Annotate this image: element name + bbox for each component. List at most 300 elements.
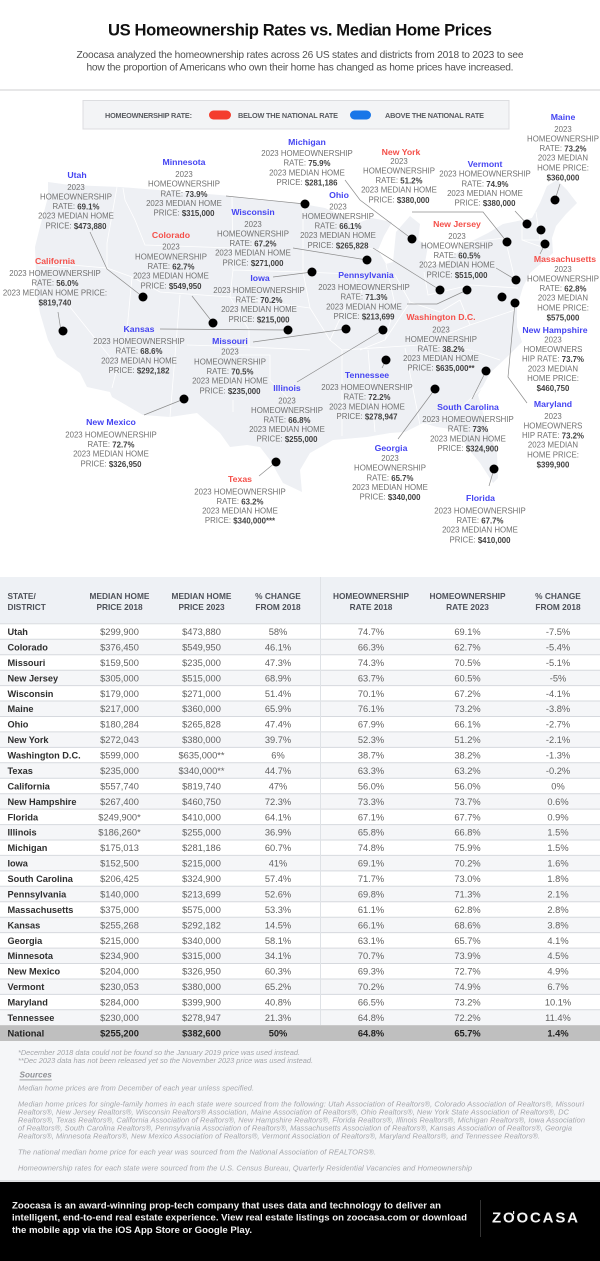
row: Wisconsin: $271,000: [182, 689, 221, 699]
label: Pennsylvania: 2023 HOMEOWNERSHIP: [318, 283, 410, 292]
table header: RATE 2018: [350, 602, 393, 612]
label: Colorado: RATE: 62.7%: [148, 262, 194, 271]
label: Georgia: RATE: 65.7%: [367, 474, 413, 482]
row: Tennessee: Tennessee: [8, 1013, 54, 1023]
row: Kansas: 68.6%: [454, 920, 481, 930]
label: Maryland: [522, 399, 584, 469]
row: Minnesota: 4.5%: [547, 951, 569, 961]
label: Washington D.C.: RATE: 38.2%: [418, 344, 464, 354]
row: National: 1.4%: [547, 1028, 569, 1038]
row: New Mexico: 69.3%: [358, 967, 384, 977]
label: California: 2023 MEDIAN HOME PRICE:: [3, 288, 107, 298]
row: Vermont: $230,053: [100, 982, 139, 992]
row: New Mexico: New Mexico: [8, 967, 60, 977]
row: Minnesota: 70.7%: [358, 951, 384, 961]
row: National: [0, 1025, 600, 1041]
row: Kansas: 66.1%: [358, 920, 384, 930]
label: Colorado: 2023 MEDIAN HOME: [133, 272, 209, 280]
label: New Hampshire: New Hampshire: [522, 325, 588, 335]
row: Texas: Texas: [8, 766, 33, 776]
row: Illinois: 1.5%: [547, 828, 569, 838]
row: Pennsylvania: 71.3%: [454, 890, 481, 900]
label: Maine: 2023: [554, 125, 572, 134]
label: Maryland: HOME PRICE:: [527, 450, 579, 460]
label: New Hampshire: [522, 325, 588, 392]
row: New Jersey: New Jersey: [8, 673, 59, 683]
table header: PRICE 2018: [96, 602, 143, 612]
label: Wisconsin: PRICE: $271,000: [222, 258, 284, 268]
label: Iowa: [213, 273, 305, 324]
label: Vermont: PRICE: $380,000: [454, 198, 516, 208]
row: Utah: -7.5%: [546, 627, 570, 637]
title: US Homeownership Rates vs. Median Home Prices: [108, 20, 492, 40]
intro text: [76, 50, 524, 74]
intro text: Zoocasa analyzed the homeownership rates across 26 US states and districts from 2018 to 2023 to see: [76, 50, 524, 61]
row: Maryland: Maryland: [8, 998, 48, 1008]
label: Texas: [194, 474, 286, 525]
label: New Jersey: [419, 219, 495, 280]
label: New Jersey: PRICE: $515,000: [426, 270, 488, 280]
row: Michigan: $281,186: [182, 843, 221, 853]
label: Iowa: Iowa: [250, 273, 270, 283]
row: Massachusetts: 61.1%: [358, 905, 384, 915]
row: California: 47%: [269, 781, 287, 791]
legend: BELOW THE NATIONAL RATE: [238, 111, 338, 120]
row: Missouri: 74.3%: [358, 658, 384, 668]
label: Missouri: HOMEOWNERSHIP: [194, 358, 266, 366]
legend: ABOVE THE NATIONAL RATE: [385, 111, 484, 120]
row: Florida: 0.9%: [547, 812, 569, 822]
row: California: California: [8, 781, 51, 791]
row: Iowa: $215,000: [182, 859, 221, 869]
label: Massachusetts: [527, 254, 599, 322]
row: New Mexico: $204,000: [100, 967, 139, 977]
notes and sources: Realtors®, Minnesota Realtors®, New Mexico Association of Realtors®, Vermont Association of Realtors®, Maryland Realtors®, and Tennessee Realtors®.: [18, 1132, 540, 1140]
label: Florida: PRICE: $410,000: [449, 536, 511, 544]
label: Missouri: PRICE: $235,000: [199, 386, 261, 396]
label: Vermont: 2023 MEDIAN HOME: [447, 189, 523, 198]
row: New York: -2.1%: [546, 735, 570, 745]
footer text: intelligent, end-to-end real estate experience. View real estate listings on zoocasa.com or download: [12, 1212, 467, 1224]
label: Pennsylvania: PRICE: $213,699: [333, 312, 395, 321]
row: New Jersey: $515,000: [182, 673, 221, 683]
label: Texas: PRICE: $340,000***: [205, 516, 276, 525]
row: New York: 51.2%: [454, 735, 481, 745]
row: New York: 52.3%: [358, 735, 384, 745]
row: Ohio: $180,284: [100, 720, 139, 730]
table header: DISTRICT: [8, 602, 46, 612]
row: Texas: 63.2%: [454, 766, 481, 776]
label: Massachusetts: 2023: [554, 265, 572, 274]
label: Massachusetts: 2023 MEDIAN: [538, 294, 588, 302]
row: Massachusetts: Massachusetts: [8, 905, 73, 915]
row: Florida: Florida: [8, 812, 39, 822]
row: Maryland: 40.8%: [265, 998, 291, 1008]
label: Georgia: 2023 MEDIAN HOME: [352, 483, 428, 492]
notes and sources: **Dec 2023 data has not been released yet so the November 2023 price was used instead.: [18, 1056, 313, 1065]
row: California: $819,740: [182, 781, 221, 791]
footer: [0, 1182, 600, 1261]
table header: RATE 2023: [446, 602, 489, 612]
row: National: $255,200: [100, 1028, 139, 1038]
label: Utah: 2023: [67, 183, 85, 192]
label: Washington D.C.: 2023 MEDIAN HOME: [403, 354, 479, 363]
logo: Zoocasa: ZOOCASA: [492, 1210, 578, 1226]
row: New York: 39.7%: [265, 735, 291, 745]
label: Michigan: Michigan: [288, 137, 326, 147]
row: Minnesota: 73.9%: [454, 951, 481, 961]
label: Illinois: 2023: [278, 396, 296, 406]
label: Ohio: Ohio: [329, 190, 349, 200]
row: Illinois: $255,000: [182, 828, 221, 838]
row: Vermont: 70.2%: [358, 982, 384, 992]
row: Ohio: 66.1%: [454, 720, 481, 730]
label: Maine: HOMEOWNERSHIP: [527, 134, 599, 144]
label: Iowa: PRICE: $215,000: [228, 315, 290, 324]
label: Minnesota: PRICE: $315,000: [153, 208, 215, 218]
label: Michigan: RATE: 75.9%: [284, 158, 330, 168]
label: South Carolina: South Carolina: [437, 402, 499, 412]
label: Maryland: HIP RATE: 73.2%: [522, 431, 584, 440]
label: Utah: HOMEOWNERSHIP: [40, 192, 112, 202]
row: Ohio: 47.4%: [265, 720, 291, 730]
notes and sources: The national median home price for each year was sourced from the National Association of REALTORS®.: [18, 1148, 376, 1156]
row: New Hampshire: $267,400: [100, 797, 139, 807]
row: Florida: $249,900*: [98, 812, 141, 822]
row: New Mexico: 60.3%: [265, 967, 291, 977]
label: Florida: Florida: [466, 493, 495, 503]
label: Washington D.C.: PRICE: $635,000**: [407, 364, 476, 372]
row: New Jersey: 63.7%: [358, 673, 384, 683]
row: Colorado: 46.1%: [265, 642, 291, 652]
row: Tennessee: 72.2%: [454, 1013, 481, 1023]
label: Utah: [38, 170, 114, 230]
row: Florida: $410,000: [182, 812, 221, 822]
row: Maine: $217,000: [100, 704, 139, 714]
row: Colorado: Colorado: [8, 642, 48, 652]
label: Pennsylvania: RATE: 71.3%: [341, 292, 387, 302]
row: South Carolina: 71.7%: [358, 874, 384, 884]
row: Michigan: Michigan: [8, 843, 48, 853]
table header: FROM 2018: [535, 602, 581, 612]
row: New Jersey: 60.5%: [454, 673, 481, 683]
row: Maine: 76.1%: [358, 704, 384, 714]
row: Utah: 69.1%: [454, 627, 481, 637]
label: New Hampshire: HOMEOWNERS: [524, 345, 582, 354]
leader lines: [58, 180, 560, 486]
row: New Hampshire: 0.6%: [547, 797, 569, 807]
row: Iowa: Iowa: [8, 859, 29, 869]
row: Tennessee: 64.8%: [358, 1013, 384, 1023]
row: Missouri: $235,000: [182, 658, 221, 668]
label: Ohio: PRICE: $265,828: [307, 241, 369, 250]
row: California: $557,740: [100, 781, 139, 791]
table header: HOMEOWNERSHIP: [429, 591, 506, 601]
label: New York: New York: [382, 147, 421, 157]
label: Washington D.C.: Washington D.C.: [406, 312, 476, 322]
row: Kansas: Kansas: [8, 920, 40, 930]
row: Washington D.C.: $635,000**: [178, 750, 225, 760]
row: Maryland: $399,900: [182, 998, 221, 1008]
row: Minnesota: $315,000: [182, 951, 221, 961]
label: New Hampshire: HOME PRICE:: [527, 374, 579, 383]
label: Michigan: PRICE: $281,186: [276, 178, 338, 187]
label: South Carolina: PRICE: $324,900: [437, 444, 499, 453]
label: Kansas: [93, 324, 185, 375]
label: Minnesota: 2023 MEDIAN HOME: [146, 199, 222, 208]
label: Maryland: 2023: [544, 412, 562, 421]
row: Texas: 63.3%: [358, 766, 384, 776]
row: Vermont: 65.2%: [265, 982, 291, 992]
notes and sources: of Realtors®, South Carolina Realtors®, Pennsylvania Association of Realtors®, Massachusetts Association of Realtors®, Kansas Association of Realtors®, Georgia: [18, 1124, 572, 1132]
row: South Carolina: $206,425: [100, 874, 139, 884]
label: Wisconsin: [215, 207, 291, 268]
label: Georgia: Georgia: [375, 443, 408, 453]
row: Missouri: -5.1%: [546, 658, 570, 668]
label: New York: HOMEOWNERSHIP: [363, 166, 435, 176]
label: Wisconsin: 2023: [244, 220, 262, 229]
row: Maine: $360,000: [182, 704, 221, 714]
row: Kansas: 14.5%: [265, 920, 291, 930]
label: Missouri: RATE: 70.5%: [207, 367, 253, 376]
row: Wisconsin: 51.4%: [265, 689, 291, 699]
row: New Jersey: $305,000: [100, 673, 139, 683]
row: Vermont: $380,000: [182, 982, 221, 992]
table: prices and homeownership rates by state: [0, 577, 600, 1041]
footer text: Zoocasa is an award-winning prop-tech company that uses data and technology to deliver an: [12, 1200, 441, 1212]
row: Colorado: $549,950: [182, 642, 221, 652]
row: Minnesota: 34.1%: [265, 951, 291, 961]
row: South Carolina: 1.8%: [547, 874, 569, 884]
row: Pennsylvania: 2.1%: [547, 890, 569, 900]
label: Minnesota: [146, 157, 222, 218]
row: Vermont: Vermont: [8, 982, 44, 992]
label: Michigan: 2023 HOMEOWNERSHIP: [261, 149, 353, 158]
row: National: 64.8%: [358, 1028, 385, 1038]
row: Wisconsin: $179,000: [100, 689, 139, 699]
label: Florida: [434, 493, 526, 544]
row: Washington D.C.: 6%: [271, 750, 285, 760]
row: Illinois: 66.8%: [454, 828, 481, 838]
label: Illinois: PRICE: $255,000: [256, 434, 318, 444]
row: Washington D.C.: -1.3%: [546, 750, 570, 760]
label: Massachusetts: RATE: 62.8%: [540, 284, 586, 293]
label: New Mexico: 2023 MEDIAN HOME: [73, 450, 149, 458]
label: Missouri: 2023 MEDIAN HOME: [192, 376, 268, 386]
label: Maryland: 2023 MEDIAN: [528, 440, 578, 450]
notes and sources: Median home prices for single-family homes in each state were sourced from the following: Utah Association of Realtors®, Colorado Association of Realtors®, Missouri: [18, 1100, 584, 1108]
row: Wisconsin: -4.1%: [546, 689, 570, 699]
row: Ohio: $265,828: [182, 720, 221, 730]
label: New Jersey: New Jersey: [433, 219, 481, 229]
row: Florida: 64.1%: [265, 812, 291, 822]
label: Tennessee: PRICE: $278,947: [336, 412, 398, 421]
row: Washington D.C.: Washington D.C.: [8, 750, 81, 760]
label: Minnesota: Minnesota: [163, 157, 206, 167]
row: Georgia: 4.1%: [547, 936, 569, 946]
row: Iowa: 1.6%: [547, 859, 569, 869]
label: Illinois: HOMEOWNERSHIP: [251, 406, 323, 415]
row: Georgia: $340,000: [182, 936, 221, 946]
label: Michigan: [261, 137, 353, 187]
label: Massachusetts: HOMEOWNERSHIP: [527, 274, 599, 284]
row: Florida: 67.7%: [454, 812, 481, 822]
label: Missouri: Missouri: [212, 336, 248, 346]
label: Illinois: Illinois: [273, 383, 301, 393]
label: New Hampshire: HIP RATE: 73.7%: [522, 354, 584, 364]
label: Utah: RATE: 69.1%: [53, 202, 99, 211]
row: Utah: $473,880: [182, 627, 221, 637]
label: New Mexico: [65, 417, 157, 468]
legend: [83, 100, 509, 129]
label: New Hampshire: 2023 MEDIAN: [528, 364, 578, 374]
label: California: RATE: 56.0%: [32, 278, 78, 288]
label: South Carolina: [422, 402, 514, 453]
row: Maryland: 66.5%: [358, 998, 384, 1008]
row: Illinois: $186,260*: [98, 828, 141, 838]
notes and sources: Sources: [20, 1070, 52, 1080]
row: Iowa: $152,500: [100, 859, 139, 869]
row: National: $382,600: [182, 1028, 221, 1038]
row: Maine: Maine: [8, 704, 34, 714]
row: Texas: $235,000: [100, 766, 139, 776]
label: Colorado: HOMEOWNERSHIP: [135, 252, 207, 262]
row: Utah: 58%: [269, 627, 287, 637]
label: Colorado: PRICE: $549,950: [140, 282, 202, 290]
label: New Hampshire: $460,750: [537, 384, 570, 392]
row: Florida: 67.1%: [358, 812, 384, 822]
row: South Carolina: 57.4%: [265, 874, 291, 884]
row: Massachusetts: $575,000: [182, 905, 221, 915]
label: Texas: 2023 MEDIAN HOME: [202, 506, 278, 516]
row: Utah: 74.7%: [358, 627, 384, 637]
label: Maine: RATE: 73.2%: [540, 144, 586, 153]
label: Georgia: PRICE: $340,000: [359, 492, 421, 502]
row: National: National: [8, 1028, 44, 1038]
label: Ohio: 2023: [329, 202, 347, 212]
row: New Hampshire: 73.7%: [454, 797, 481, 807]
row: Vermont: 74.9%: [454, 982, 481, 992]
label: New Jersey: HOMEOWNERSHIP: [421, 242, 493, 250]
row: Colorado: 62.7%: [454, 642, 481, 652]
label: Colorado: Colorado: [152, 230, 190, 240]
row: Ohio: 67.9%: [358, 720, 384, 730]
row: Wisconsin: 70.1%: [358, 689, 384, 699]
label: Texas: 2023 HOMEOWNERSHIP: [194, 488, 286, 496]
row: Pennsylvania: Pennsylvania: [8, 890, 67, 900]
row: New Hampshire: 72.3%: [265, 797, 291, 807]
row: Tennessee: 21.3%: [265, 1013, 291, 1023]
table header: FROM 2018: [255, 602, 301, 612]
table header: STATE/: [8, 591, 36, 601]
row: New Hampshire: $460,750: [182, 797, 221, 807]
row: Colorado: 66.3%: [358, 642, 384, 652]
label: South Carolina: 2023 HOMEOWNERSHIP: [422, 415, 514, 424]
label: Kansas: PRICE: $292,182: [108, 366, 170, 375]
label: New Hampshire: 2023: [544, 336, 562, 344]
row: Maine: -3.8%: [546, 704, 570, 714]
row: Georgia: 58.1%: [265, 936, 291, 946]
row: New Mexico: 72.7%: [454, 967, 481, 977]
row: Pennsylvania: 69.8%: [358, 890, 384, 900]
label: New York: PRICE: $380,000: [368, 196, 430, 204]
row: Maryland: $284,000: [100, 998, 139, 1008]
footer text: the mobile app via the iOS App Store or Google Play.: [12, 1225, 252, 1236]
label: Vermont: RATE: 74.9%: [462, 180, 508, 188]
row: New York: $380,000: [182, 735, 221, 745]
label: Texas: RATE: 63.2%: [217, 497, 263, 506]
label: Maine: 2023 MEDIAN: [538, 154, 588, 162]
label: Georgia: HOMEOWNERSHIP: [354, 464, 426, 472]
label: Iowa: RATE: 70.2%: [236, 296, 282, 304]
label: New Jersey: RATE: 60.5%: [434, 251, 480, 260]
row: New Hampshire: New Hampshire: [8, 797, 76, 807]
row: Massachusetts: 62.8%: [454, 905, 481, 915]
row: California: 56.0%: [358, 781, 384, 791]
label: Missouri: [192, 336, 268, 396]
table header: HOMEOWNERSHIP: [333, 591, 409, 601]
row: Maryland: 73.2%: [454, 998, 481, 1008]
row: Washington D.C.: 38.2%: [454, 750, 481, 760]
row: Washington D.C.: $599,000: [100, 750, 139, 760]
row: Missouri: 47.3%: [265, 658, 291, 668]
row: Ohio: Ohio: [8, 720, 29, 730]
label: Washington D.C.: HOMEOWNERSHIP: [405, 335, 477, 344]
table header: % CHANGE: [535, 591, 581, 601]
label: Illinois: RATE: 66.8%: [264, 416, 310, 424]
row: New Mexico: $326,950: [182, 967, 221, 977]
row: Tennessee: $230,000: [100, 1013, 139, 1023]
table header: PRICE 2023: [178, 602, 225, 612]
label: Utah: 2023 MEDIAN HOME: [38, 212, 114, 220]
label: Illinois: [249, 383, 325, 444]
label: Colorado: [133, 230, 209, 290]
label: Georgia: [352, 443, 428, 502]
label: South Carolina: 2023 MEDIAN HOME: [430, 434, 506, 444]
row: Missouri: 70.5%: [454, 658, 481, 668]
label: Iowa: 2023 MEDIAN HOME: [221, 305, 297, 314]
row: National: 65.7%: [454, 1028, 481, 1038]
label: New York: RATE: 51.2%: [376, 176, 422, 185]
label: Missouri: 2023: [221, 348, 239, 356]
legend: HOMEOWNERSHIP RATE:: [105, 111, 192, 120]
row: Minnesota: $234,900: [100, 951, 139, 961]
row: Illinois: 36.9%: [265, 828, 291, 838]
label: Texas: Texas: [228, 474, 252, 484]
row: National: 50%: [269, 1028, 288, 1038]
label: Washington D.C.: 2023: [432, 326, 450, 334]
row: Minnesota: Minnesota: [8, 951, 54, 961]
label: Utah: PRICE: $473,880: [45, 222, 107, 230]
label: New York: [361, 147, 437, 204]
label: New Mexico: 2023 HOMEOWNERSHIP: [65, 430, 157, 440]
label: Kansas: Kansas: [124, 324, 155, 334]
label: New Mexico: RATE: 72.7%: [88, 440, 134, 449]
row: Michigan: 60.7%: [265, 843, 291, 853]
row: Pennsylvania: $140,000: [100, 890, 139, 900]
label: Ohio: HOMEOWNERSHIP: [302, 212, 374, 221]
row: Tennessee: 11.4%: [545, 1013, 571, 1023]
intro text: how the proportion of Americans who own their home has changed as home prices have increased.: [86, 62, 514, 74]
label: Kansas: 2023 MEDIAN HOME: [101, 356, 177, 366]
label: California: $819,740: [39, 298, 72, 307]
label: Washington D.C.: [403, 312, 479, 372]
row: Texas: -0.2%: [546, 766, 570, 776]
label: Iowa: 2023 HOMEOWNERSHIP: [213, 286, 305, 295]
row: Maine: 65.9%: [265, 704, 291, 714]
label: Tennessee: [321, 370, 413, 421]
row: Utah: Utah: [8, 627, 28, 637]
